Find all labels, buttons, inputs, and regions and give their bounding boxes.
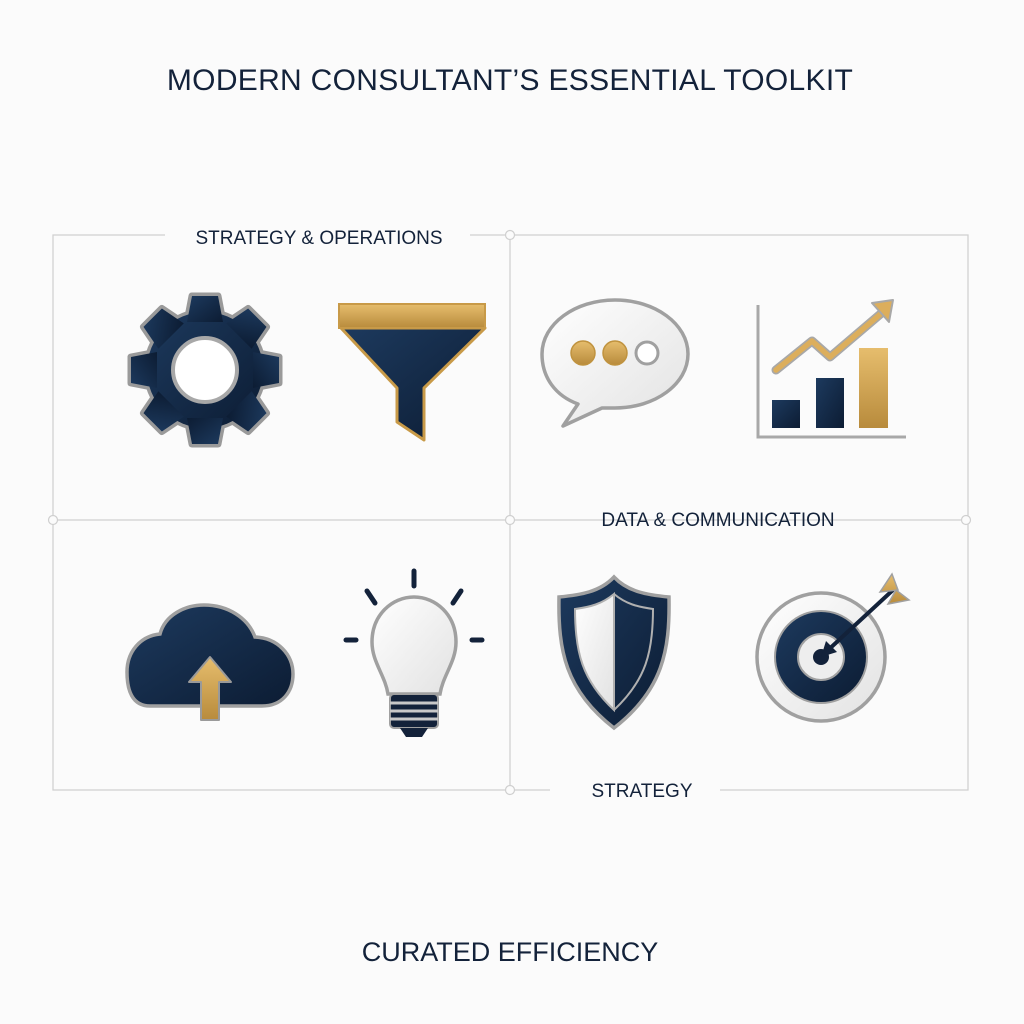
icon: cloud upload: [127, 605, 293, 720]
section label: strategy: STRATEGY: [592, 781, 692, 802]
footer: CURATED EFFICIENCY: [362, 937, 658, 967]
section label: data & communication: DATA & COMMUNICATION: [601, 510, 835, 531]
icon: target with arrow: [757, 574, 909, 721]
icon: gear: [131, 296, 279, 444]
icon: shield: [559, 577, 669, 728]
title: MODERN CONSULTANT’S ESSENTIAL TOOLKIT: [167, 64, 853, 97]
icon: light bulb: [346, 571, 482, 737]
icon: funnel: [339, 304, 485, 440]
section label: strategy & operations: STRATEGY & OPERATIONS: [195, 228, 443, 249]
icon: speech bubble: [542, 300, 688, 426]
icon: growth chart: [758, 300, 906, 437]
